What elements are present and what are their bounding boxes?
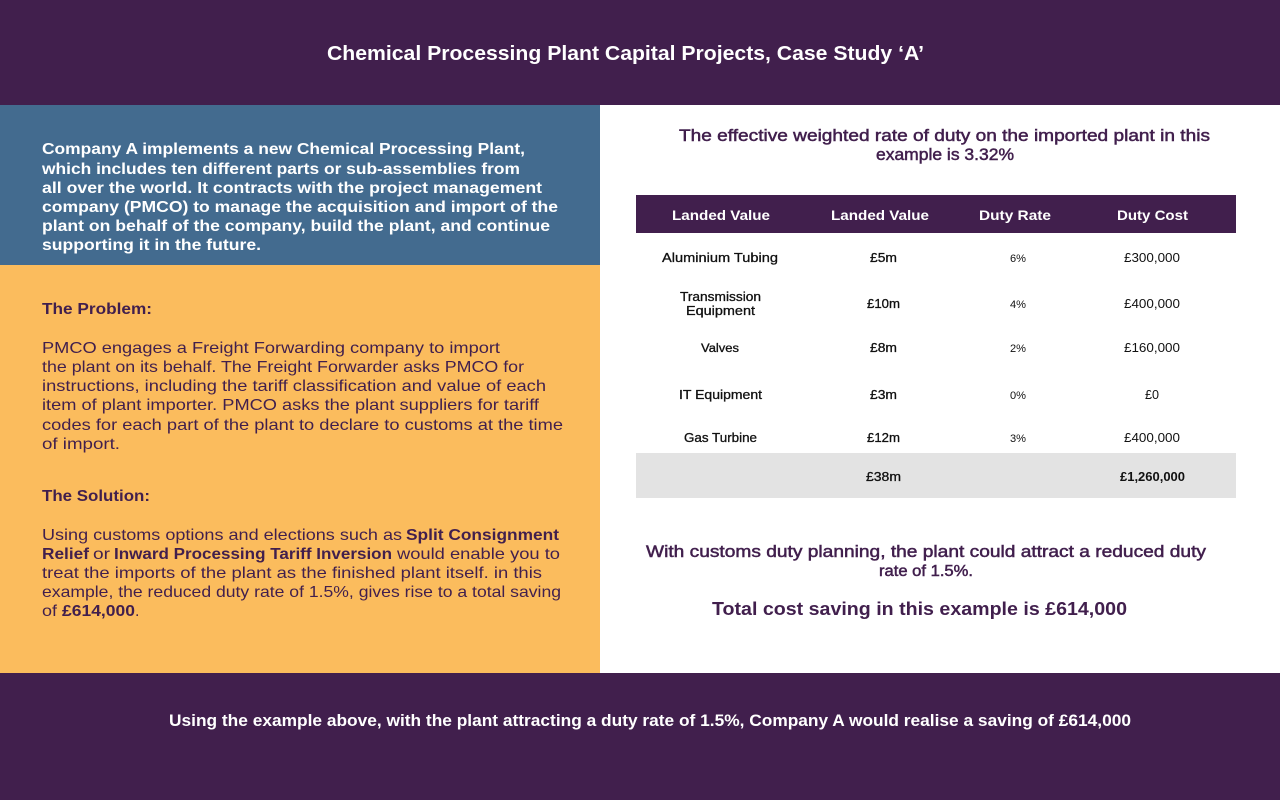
problem text bbox=[42, 340, 563, 453]
panel: problem and solution bbox=[0, 265, 600, 673]
row: valves bbox=[701, 341, 1180, 355]
introduction text: plant on behalf of the company, build the plant, and continue bbox=[42, 218, 550, 235]
header band bbox=[0, 0, 1280, 105]
row: gas turbine: 3% bbox=[1010, 433, 1026, 445]
effective duty rate statement: The effective weighted rate of duty on the imported plant in this bbox=[679, 127, 1210, 145]
effective duty rate statement bbox=[679, 127, 1210, 164]
row: transmission equipment: £10m bbox=[867, 297, 900, 311]
row: transmission equipment: Equipment bbox=[686, 304, 756, 318]
row: valves: £8m bbox=[870, 341, 897, 355]
problem text: instructions, including the tariff classification and value of each bbox=[42, 378, 546, 395]
introduction text bbox=[41, 141, 558, 254]
solution text: example, the reduced duty rate of 1.5%, gives rise to a total saving bbox=[42, 584, 561, 601]
row: gas turbine: Gas Turbine bbox=[684, 431, 757, 445]
duty table bbox=[636, 195, 1236, 498]
row: valves: 2% bbox=[1010, 343, 1026, 355]
row: aluminium tubing: Aluminium Tubing bbox=[662, 251, 778, 265]
table header row: Duty Cost bbox=[1117, 207, 1188, 223]
solution text: Relief bbox=[42, 546, 90, 563]
introduction text: Company A implements a new Chemical Processing Plant, bbox=[42, 141, 525, 158]
row: it equipment: £0 bbox=[1145, 388, 1159, 402]
problem text: PMCO engages a Freight Forwarding company to import bbox=[42, 340, 501, 357]
row: gas turbine bbox=[684, 431, 1180, 445]
row: valves: £160,000 bbox=[1124, 341, 1180, 355]
effective duty rate statement: example is 3.32% bbox=[876, 146, 1014, 164]
solution text bbox=[42, 527, 561, 620]
row: aluminium tubing: £5m bbox=[870, 251, 897, 265]
problem text: of import. bbox=[42, 436, 120, 453]
solution text: of bbox=[42, 603, 58, 620]
introduction text: all over the world. It contracts with the project management bbox=[42, 180, 543, 197]
row: it equipment: 0% bbox=[1010, 390, 1026, 402]
row: transmission equipment: 4% bbox=[1010, 299, 1026, 311]
introduction text: supporting it in the future. bbox=[42, 237, 261, 254]
row: it equipment: £3m bbox=[870, 388, 897, 402]
row: totals: £38m bbox=[866, 470, 901, 484]
row: valves: Valves bbox=[701, 343, 739, 355]
solution text: Split Consignment bbox=[406, 527, 560, 544]
footer band bbox=[0, 673, 1280, 800]
solution text: . bbox=[135, 603, 139, 620]
reduced duty statement: With customs duty planning, the plant could attract a reduced duty bbox=[646, 543, 1207, 561]
problem text: the plant on its behalf. The Freight Forwarder asks PMCO for bbox=[42, 359, 525, 376]
table header row: Landed Value bbox=[831, 207, 929, 223]
solution text: Using customs options and elections such as bbox=[42, 527, 402, 544]
reduced duty statement: rate of 1.5%. bbox=[879, 563, 973, 580]
table header row: Landed Value bbox=[672, 207, 770, 223]
row: aluminium tubing bbox=[662, 251, 1180, 265]
solution text: would enable you to bbox=[396, 546, 560, 563]
row: gas turbine: £400,000 bbox=[1124, 431, 1180, 445]
table header row: Duty Rate bbox=[979, 207, 1051, 223]
row: totals: £1,260,000 bbox=[1120, 470, 1185, 484]
title: Chemical Processing Plant Capital Projects, Case Study ‘A’ bbox=[327, 42, 924, 65]
row: aluminium tubing: 6% bbox=[1010, 253, 1026, 265]
row: aluminium tubing: £300,000 bbox=[1124, 251, 1180, 265]
introduction text: which includes ten different parts or sub-assemblies from bbox=[41, 161, 520, 178]
table header row bbox=[636, 195, 1236, 233]
introduction text: company (PMCO) to manage the acquisition and import of the bbox=[42, 199, 558, 216]
heading: the problem: The Problem: bbox=[42, 301, 152, 318]
row: totals bbox=[636, 453, 1236, 498]
solution text: £614,000 bbox=[62, 603, 135, 620]
problem text: item of plant importer. PMCO asks the plant suppliers for tariff bbox=[42, 397, 540, 414]
reduced duty statement bbox=[646, 543, 1207, 580]
footer text: Using the example above, with the plant attracting a duty rate of 1.5%, Company A would realise a saving of £614,000 bbox=[169, 712, 1131, 730]
row: it equipment bbox=[679, 388, 1159, 402]
row: gas turbine: £12m bbox=[867, 431, 900, 445]
solution text: treat the imports of the plant as the finished plant itself. in this bbox=[42, 565, 542, 582]
row: transmission equipment: Transmission bbox=[680, 290, 761, 304]
solution text: or bbox=[93, 546, 111, 563]
heading: the solution: The Solution: bbox=[42, 488, 150, 505]
panel: introduction bbox=[0, 105, 600, 265]
total cost saving: Total cost saving in this example is £614,000 bbox=[712, 598, 1127, 619]
row: transmission equipment: £400,000 bbox=[1124, 297, 1180, 311]
problem text: codes for each part of the plant to declare to customs at the time bbox=[42, 417, 563, 434]
solution text: Inward Processing Tariff Inversion bbox=[114, 546, 392, 563]
row: it equipment: IT Equipment bbox=[679, 388, 763, 402]
row: transmission equipment bbox=[680, 290, 1180, 318]
